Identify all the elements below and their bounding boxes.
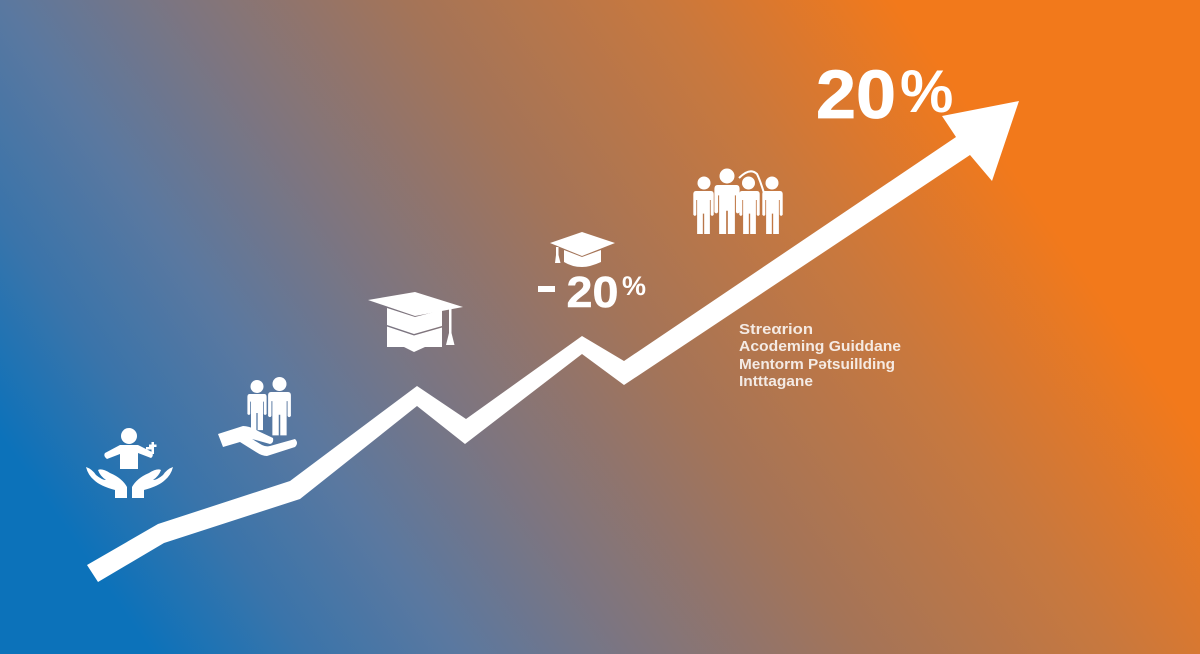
- icon: large graduation cap: [368, 292, 463, 352]
- text block: strategy list: Acodeming Guiddane: [739, 339, 901, 355]
- large percentage label: %: [900, 58, 953, 125]
- icon: two people on an open hand: [218, 377, 297, 456]
- text block: strategy list: Streαrion: [739, 322, 813, 338]
- growth arrow: [87, 101, 1019, 582]
- small percentage label: %: [622, 271, 646, 301]
- text block: strategy list: [739, 322, 901, 390]
- icon: person with plus held in two hands: [86, 428, 173, 498]
- large percentage label: 20: [816, 56, 896, 133]
- small percentage label: [538, 268, 646, 317]
- text block: strategy list: Mentorm Pətsuillding: [739, 357, 895, 373]
- icon: small graduation cap: [550, 232, 615, 267]
- icon: group of four people: [693, 168, 783, 234]
- large percentage label: [816, 56, 953, 133]
- text block: strategy list: Intttagane: [739, 374, 813, 390]
- small percentage label: 20: [566, 268, 618, 317]
